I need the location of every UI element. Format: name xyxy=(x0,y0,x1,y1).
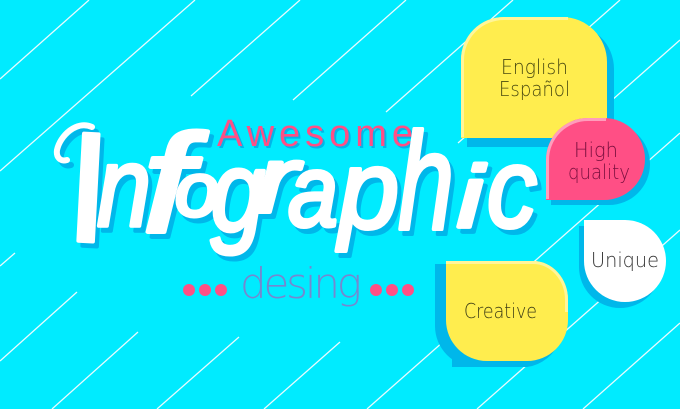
title: Infographic: n xyxy=(97,124,151,250)
flourish on the capital I xyxy=(57,125,92,160)
right dots xyxy=(370,284,414,296)
title: Infographic: i xyxy=(457,149,487,246)
speech bubble: Creative xyxy=(435,261,568,367)
label: High quality: High xyxy=(574,138,618,162)
title: Infographic: I xyxy=(62,100,115,276)
heading: Awesome: Awesome xyxy=(217,113,413,155)
subtitle: desing: desing xyxy=(240,259,362,308)
title: Infographic: g xyxy=(211,129,265,256)
label: Unique: Unique xyxy=(591,248,659,272)
label: English Español: Español xyxy=(499,77,570,101)
title: Infographic: f xyxy=(142,105,208,262)
label: High quality: quality xyxy=(568,160,630,184)
title: Infographic: o xyxy=(175,148,219,232)
speech bubble: High quality xyxy=(546,118,650,205)
title: Infographic xyxy=(57,100,537,276)
title: Infographic: h xyxy=(398,105,454,259)
left dots xyxy=(183,284,227,296)
label: English Español: English xyxy=(501,55,568,79)
label: Creative: Creative xyxy=(464,299,537,323)
speech bubble: Unique xyxy=(579,220,666,308)
speech bubble: English Español xyxy=(461,17,614,147)
title: Infographic: r xyxy=(256,127,303,232)
title: Infographic: p xyxy=(336,128,399,252)
title: Infographic: a xyxy=(288,134,338,248)
title: Infographic: c xyxy=(487,125,537,251)
